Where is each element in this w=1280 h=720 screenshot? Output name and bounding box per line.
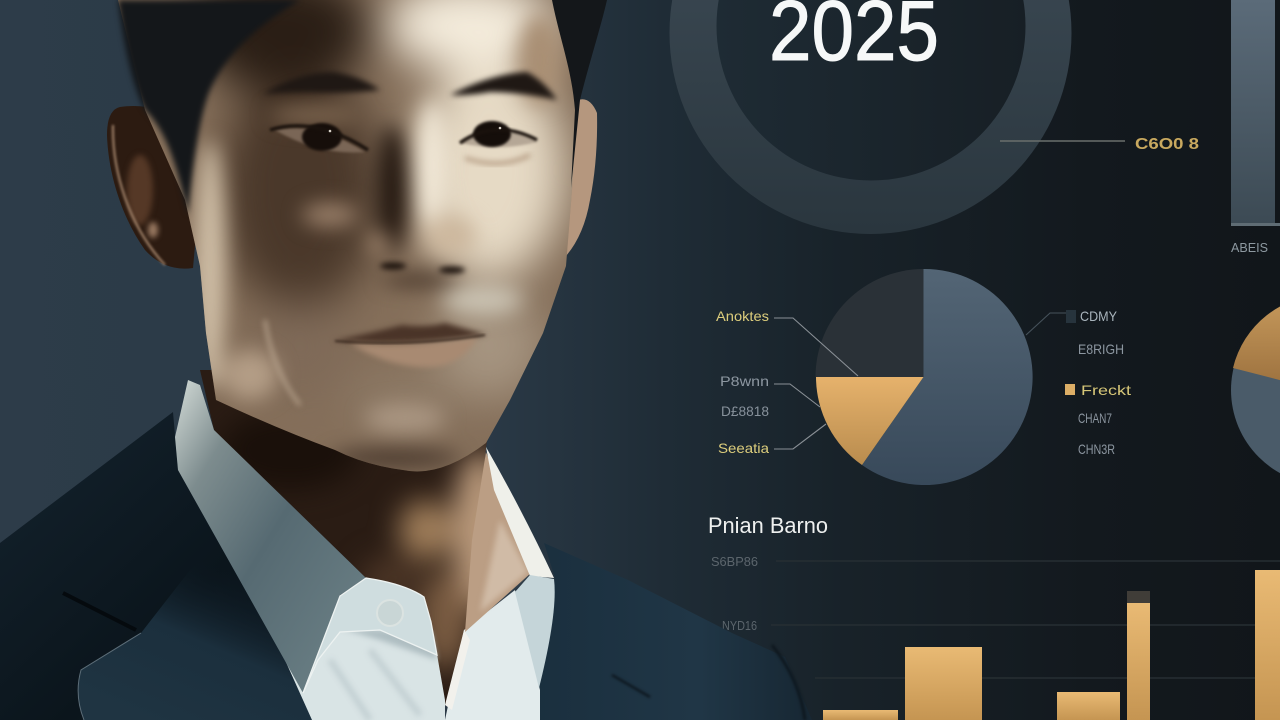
slice: dark [816,269,924,377]
top right vertical bar [1231,0,1280,255]
pie right labels: E8RIGH [1078,341,1124,357]
hair [118,0,607,215]
right eye [460,121,537,163]
slice: gold [816,377,924,465]
axis labels: S6BP86 [711,555,758,569]
bar axis label: ABEIS [1231,240,1268,255]
bar chart title: Pnian Barno [708,513,828,538]
mouth [333,323,487,367]
axis labels: NYD16 [722,619,757,633]
donut label: C6O0 8 [1135,136,1199,153]
lapel left [78,520,330,720]
pie left labels: Anoktes [716,308,769,324]
donut chart with 2025 [670,0,1199,234]
face [118,0,575,472]
slice: blue-gray [862,269,1033,485]
portrait of man [0,0,812,720]
axis labels [711,555,758,633]
slice: blue [1231,295,1280,485]
pie left labels: P8wnn [720,373,769,389]
right ear [566,99,597,256]
nostrils [380,262,465,274]
jacket left [0,412,322,720]
pie right labels [1078,308,1131,457]
nasolabial highlight [265,320,300,405]
dark legend swatch [1066,310,1076,323]
gridlines [771,561,1280,678]
bars [823,570,1280,720]
pie right leader line [1026,313,1070,335]
pie left labels [716,308,769,456]
pie right labels: Freckt [1081,382,1131,398]
lapel notch [63,593,136,630]
left collar [175,380,437,693]
bar chart [708,513,1280,720]
main pie chart [716,269,1131,485]
left ear [107,106,200,269]
gold legend swatch [1065,384,1075,395]
donut ring [670,0,1072,234]
neck [200,370,487,704]
eyebrows [263,72,557,100]
left eye [270,123,368,153]
lapel edge [78,633,141,720]
pie right labels: CDMY [1080,308,1118,324]
slice: gold [1233,295,1280,392]
pie right labels: CHAN7 [1078,410,1112,426]
shirt front [285,590,540,720]
donut leader line [1000,140,1125,142]
pie right labels: CHN3R [1078,441,1115,457]
second pie chart cropped [1231,295,1280,485]
shirt button [377,600,403,626]
right collar [465,447,555,688]
pie left labels: D£8818 [721,403,769,419]
pie left leader lines [774,318,858,449]
jacket right [530,543,812,720]
donut hole [716,0,1026,180]
pie left labels: Seeatia [718,440,769,456]
